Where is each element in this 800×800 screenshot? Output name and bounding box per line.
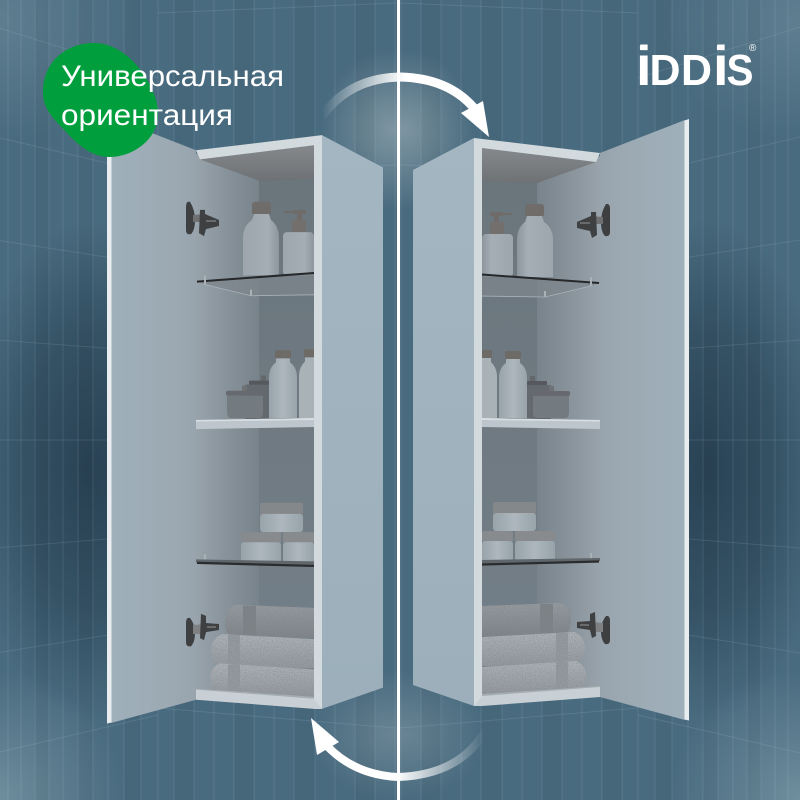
logo: IDDIS: i bbox=[636, 34, 652, 97]
stacked towels bbox=[482, 603, 586, 694]
green blob behind heading bbox=[43, 43, 158, 157]
top hinge bbox=[577, 204, 610, 238]
arrow: bottom clockwise bbox=[311, 718, 484, 777]
cabinet: right orientation, door hinged on the right bbox=[413, 119, 689, 720]
door bbox=[600, 119, 689, 720]
logo: IDDIS: ® bbox=[749, 43, 757, 54]
right wall: tile background bbox=[398, 0, 800, 800]
cabinet: left orientation, door hinged on the left bbox=[107, 116, 383, 723]
bottom hinge bbox=[577, 612, 610, 644]
white front edges bbox=[474, 138, 600, 706]
top underside bbox=[482, 148, 596, 183]
heading: ориентация bbox=[61, 99, 233, 132]
lower jars on glass shelf bbox=[482, 502, 600, 565]
interior side wall bbox=[537, 156, 600, 694]
glass shelf with reflection bbox=[482, 275, 600, 297]
logo: IDDIS: i bbox=[713, 34, 729, 97]
logo: IDDIS: D bbox=[681, 46, 712, 95]
interior back wall bbox=[482, 178, 538, 694]
heading: Универсальная bbox=[61, 60, 284, 93]
vertical divider line bbox=[397, 0, 400, 800]
logo: IDDIS: S bbox=[726, 46, 754, 95]
left wall: mirrored tile background bbox=[0, 0, 398, 800]
logo: IDDIS bbox=[640, 44, 756, 86]
bottom panel bbox=[474, 686, 600, 706]
middle bottles and jars bbox=[482, 350, 570, 419]
heading bbox=[61, 60, 284, 132]
upper bottles on glass shelf bbox=[482, 204, 600, 297]
solid middle shelf bbox=[482, 418, 600, 429]
carcass side panel bbox=[413, 138, 474, 706]
arrow: top clockwise bbox=[322, 77, 489, 137]
logo: IDDIS: D bbox=[650, 46, 680, 95]
